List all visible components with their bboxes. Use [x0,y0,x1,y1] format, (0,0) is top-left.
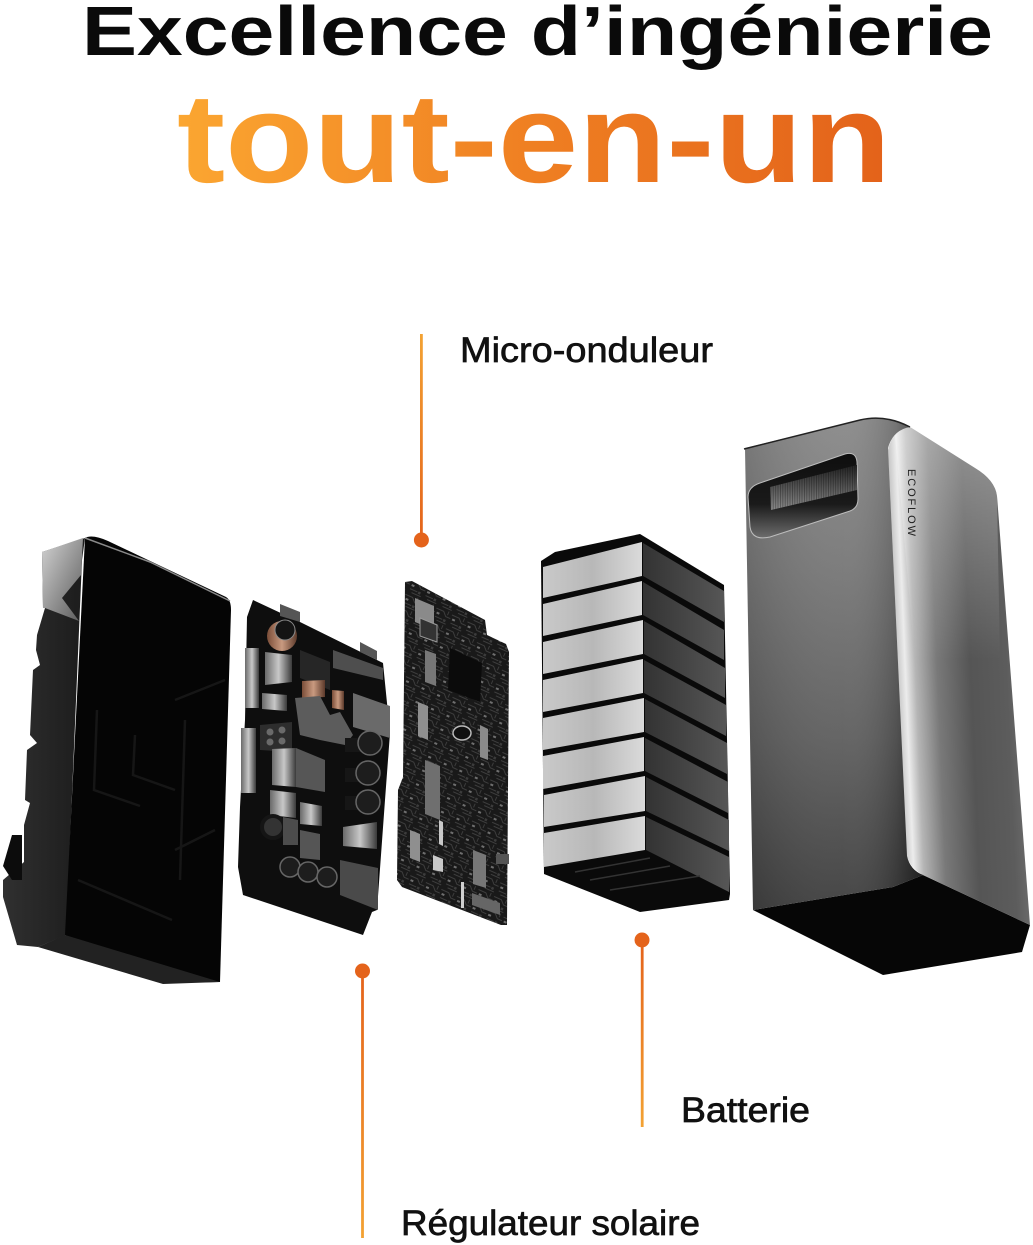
battery cell 3 [543,620,725,698]
dark chip strip [300,650,330,690]
battery cell 4 [543,659,726,736]
battery base ribs [575,858,700,890]
leader dot [414,532,429,548]
connector block [283,817,298,845]
lower silver blocks [270,790,296,818]
label: Batterie [681,1091,810,1130]
pads lower middle [425,760,440,820]
connector block [420,618,437,642]
round connector [262,816,284,838]
ECOFLOW logo: ECOFLOW [905,469,917,537]
enclosure front panel [745,418,923,910]
lower capacitors [280,857,337,887]
side panel top sheen [895,427,1000,660]
title line: tout-en-un: tout-en-un [177,67,891,209]
chip column left [425,650,436,686]
exploded component: battery pack [541,534,730,912]
leader line [641,942,644,1127]
exploded component: rear case [3,537,231,984]
power pads [415,598,434,630]
pads right column [480,725,488,760]
callout: Micro-onduleur [414,331,713,548]
top coil [267,621,297,651]
small capacitor cluster [260,722,292,752]
edge pins [472,893,500,915]
handle recess [748,453,858,538]
pads lower right [473,850,486,888]
transformer block top right [353,693,390,738]
battery dark backing and grooves [541,534,730,912]
case rim highlights [85,538,230,601]
transformer dark side [296,748,325,792]
front panel shading [745,418,923,910]
capacitor [453,726,471,740]
case translucent top corner [42,538,83,621]
callout: Batterie [634,932,810,1130]
case inner ribs [78,680,225,920]
central silver block [295,696,353,745]
case inner cavity [65,537,231,983]
edge clip [496,854,509,864]
lower right transformer [340,860,378,910]
enclosure side panel [888,427,1030,925]
main processor chip [448,648,482,702]
leader line [420,334,423,538]
leader dot [355,964,370,978]
capacitor caps cluster [266,726,286,746]
grille ribs [770,465,857,510]
silver strips [433,820,443,872]
lower centre block [300,802,322,826]
battery cell 7 [544,776,729,851]
copper coil right [332,690,344,710]
board side metal rail [245,648,259,708]
PCB board [397,581,509,925]
lower centre silver [300,830,320,860]
grey block one [265,652,292,685]
leader dot [634,932,650,948]
top coil centre [275,620,295,640]
heat sink block top right [333,650,383,680]
pads column [418,702,428,740]
battery cell 1 [543,542,724,622]
capacitors right [345,731,382,814]
battery cell 5 [543,698,727,774]
callout: Régulateur solaire [355,964,700,1243]
pads lower left [410,830,420,862]
case side connector [3,835,22,880]
battery cell 6 [543,737,728,813]
front panel top edge [744,418,910,449]
case bottom lip [38,935,220,984]
exploded component: solar regulator board [238,600,390,935]
grey block two [262,693,287,711]
exploded component: micro-inverter PCB [397,581,509,925]
leader line [361,973,364,1238]
battery cell 2 [543,581,724,660]
board base [238,600,390,935]
white strip [461,882,464,908]
label: Micro-onduleur [460,331,713,370]
board side metal rail lower [241,728,256,793]
case side wall [3,538,85,947]
enclosure underside [753,875,1030,975]
top tabs [280,604,377,660]
copper coil centre [302,680,325,698]
handle grille [770,465,857,510]
label: Régulateur solaire [401,1204,700,1243]
right grey block [343,822,377,849]
battery cell 8 [544,816,729,892]
silver transformer [272,748,296,787]
product: EcoFlow enclosure [744,418,1030,975]
